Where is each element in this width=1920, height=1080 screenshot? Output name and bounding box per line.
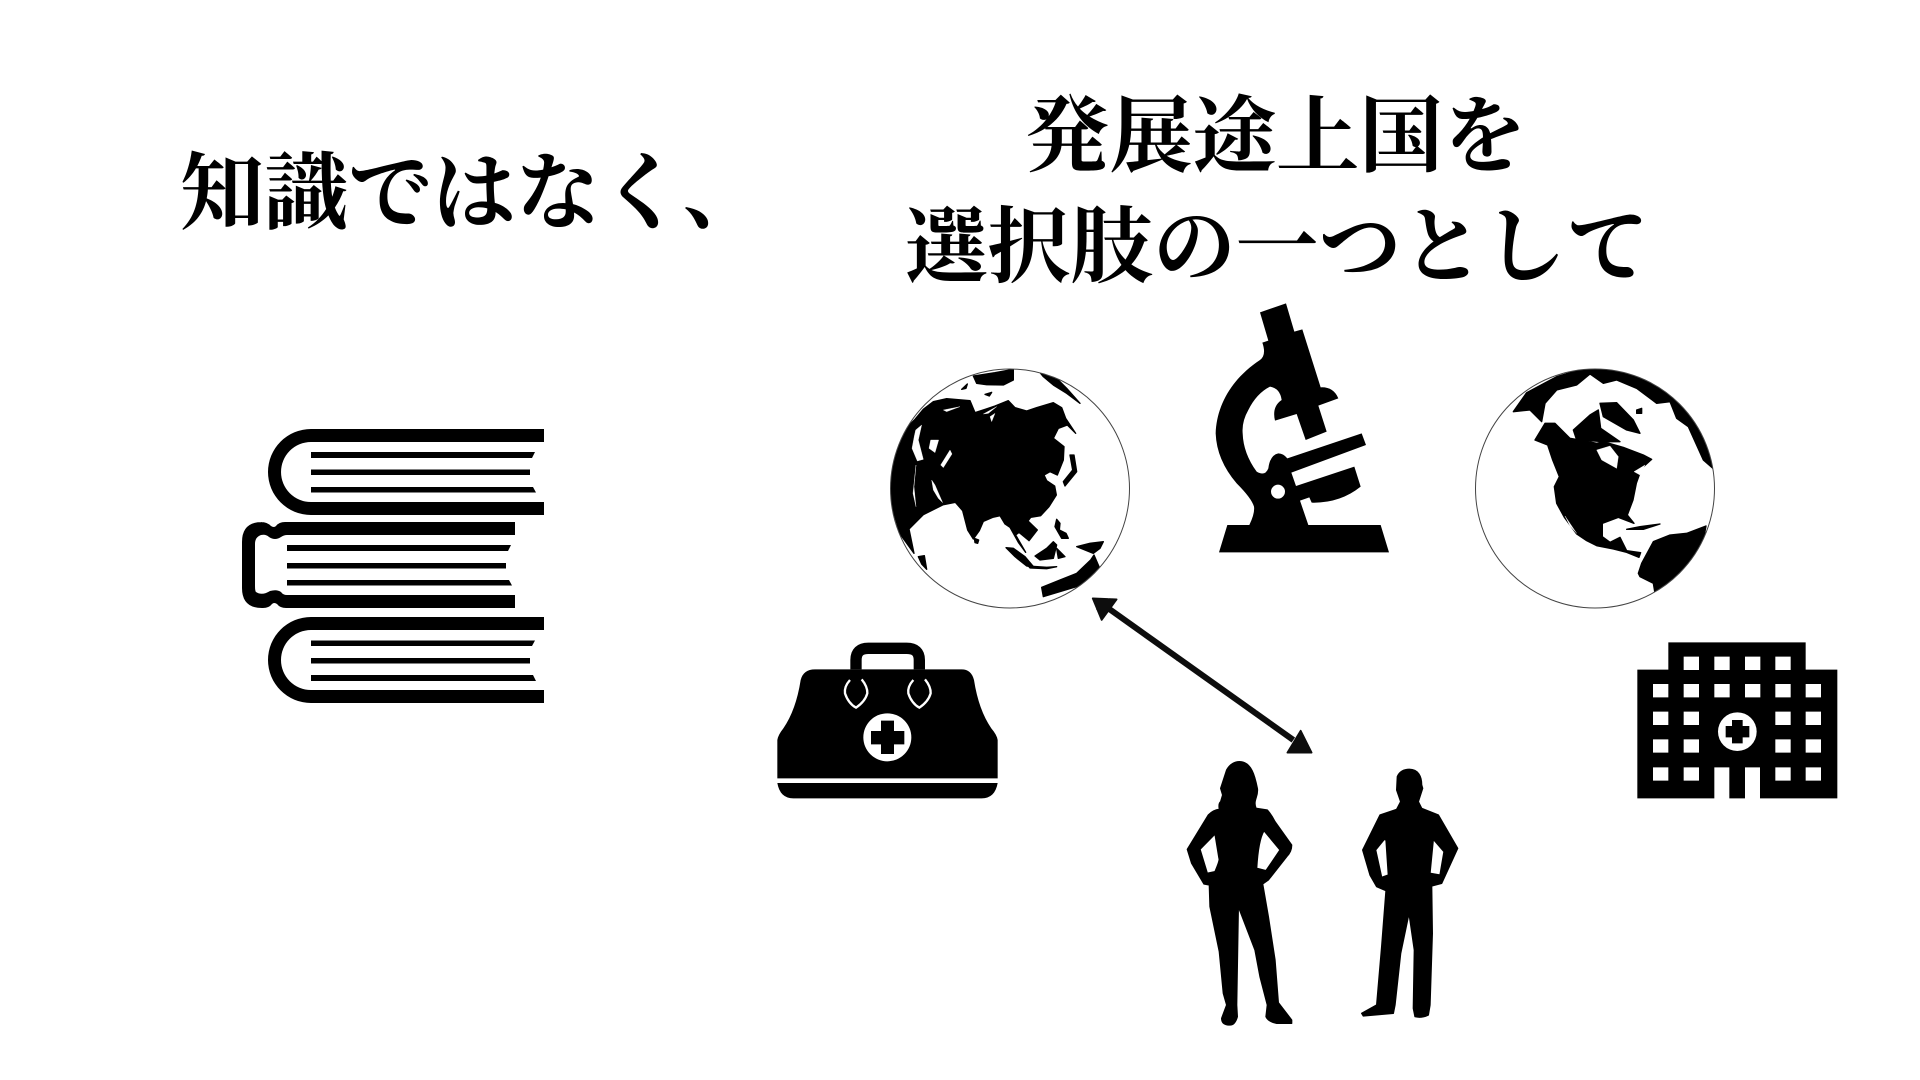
icon: doctor bag	[777, 648, 998, 798]
heading: left: 知識ではなく、	[180, 148, 766, 241]
icon: hospital building	[1637, 642, 1837, 798]
heading: right	[905, 92, 1649, 294]
icon: globe North America	[1476, 365, 1717, 608]
heading: right: 発展途上国を	[1026, 92, 1526, 184]
arrow: double-headed between globe and people	[1093, 598, 1312, 753]
heading: right: 選択肢の一つとして	[905, 202, 1649, 294]
icon: woman silhouette	[1187, 762, 1292, 1025]
icon: man silhouette	[1362, 769, 1458, 1017]
icon: microscope	[1216, 303, 1389, 552]
icon: stack of books	[242, 429, 544, 703]
icon: globe Asia	[888, 368, 1130, 608]
